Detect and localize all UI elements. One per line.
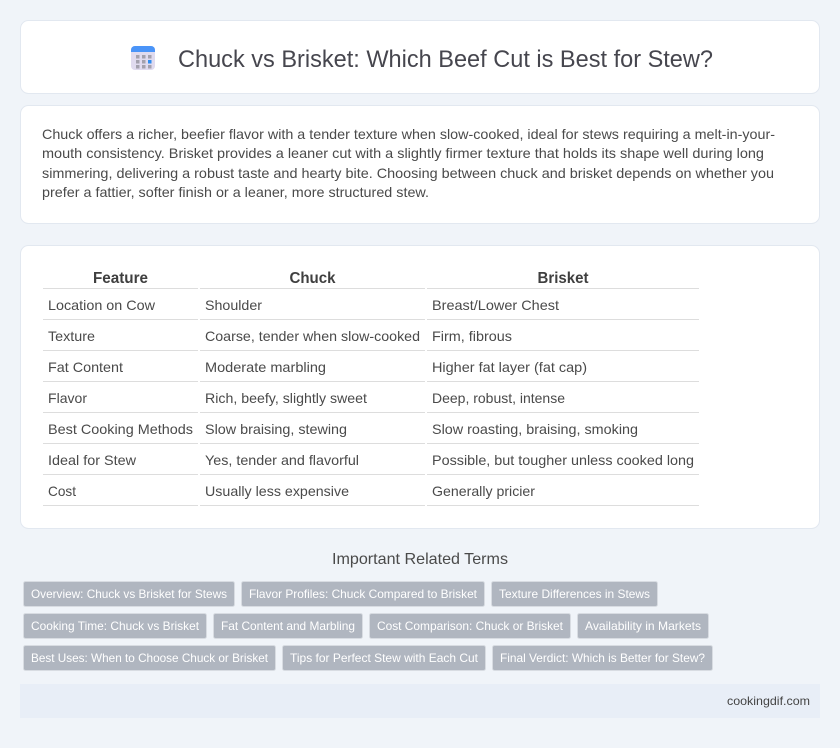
tag (282, 646, 486, 670)
tag: Cooking Time: Chuck vs Brisket (31, 619, 200, 633)
tag (24, 646, 276, 670)
table row: best cooking methods (48, 421, 638, 437)
tag: Final Verdict: Which is Better for Stew? (500, 651, 705, 665)
tag (578, 614, 708, 638)
related term tags (24, 582, 712, 670)
table row: texture: Coarse, tender when slow-cooked (205, 328, 420, 344)
table row: flavor: Rich, beefy, slightly sweet (205, 390, 367, 406)
table row: location on cow (48, 297, 559, 313)
text block: introduction paragraph: Chuck offers a richer, beefier flavor with a tender texture when slow-cooked, ideal for stews requiring a melt-in-your- (42, 126, 775, 142)
tag: Overview: Chuck vs Brisket for Stews (31, 587, 227, 601)
table row: cost (48, 483, 535, 499)
tag: Best Uses: When to Choose Chuck or Brisket (31, 651, 269, 665)
table row: location on cow: Shoulder (205, 297, 262, 313)
table row: flavor: Deep, robust, intense (432, 390, 565, 406)
table row: best cooking methods: Slow braising, stewing (205, 421, 347, 437)
table row: flavor: Flavor (48, 390, 87, 406)
text block: introduction paragraph: mouth consistency. Brisket provides a leaner cut with a slightly firmer texture that holds its shape well during long (42, 145, 764, 161)
table row: cost: Usually less expensive (205, 483, 349, 499)
table row: cost: Cost (48, 483, 76, 499)
table row: fat content: Higher fat layer (fat cap) (432, 359, 587, 375)
tag (24, 614, 206, 638)
table row: location on cow: Breast/Lower Chest (432, 297, 559, 313)
tag (24, 582, 234, 606)
table row: ideal for stew: Yes, tender and flavorful (205, 452, 359, 468)
tag: Tips for Perfect Stew with Each Cut (290, 651, 479, 665)
text block: introduction paragraph: simmering, delivering a robust taste and hearty bite. Choosing between chuck and brisket depends on whether you (42, 165, 774, 181)
icon: calendar (131, 46, 155, 70)
text block: introduction paragraph (42, 126, 775, 200)
table row: fat content: Moderate marbling (205, 359, 326, 375)
panel: comparison table (20, 246, 820, 528)
tag: Availability in Markets (585, 619, 701, 633)
table row: fat content (48, 359, 587, 375)
table header row (93, 270, 589, 287)
table row: ideal for stew: Ideal for Stew (48, 452, 137, 468)
panel: title header (20, 20, 820, 94)
table row: flavor (48, 390, 565, 406)
footer (20, 684, 820, 718)
table row: ideal for stew (48, 452, 694, 468)
tag (492, 646, 712, 670)
tag: Texture Differences in Stews (499, 587, 650, 601)
table header row: Brisket (538, 270, 589, 287)
tag (370, 614, 570, 638)
table row: texture: Texture (48, 328, 95, 344)
panel: introduction (20, 106, 820, 224)
title: Chuck vs Brisket: Which Beef Cut is Best for Stew? (178, 46, 713, 73)
heading: important related terms: Important Related Terms (332, 551, 508, 568)
tag: Flavor Profiles: Chuck Compared to Brisket (249, 587, 478, 601)
table header row: Chuck (290, 270, 336, 287)
table row: cost: Generally pricier (432, 483, 535, 499)
table row: texture (48, 328, 512, 344)
footer source label: cookingdif.com (727, 694, 810, 708)
table row: best cooking methods: Slow roasting, braising, smoking (432, 421, 638, 437)
table row: ideal for stew: Possible, but tougher unless cooked long (432, 452, 694, 468)
table row: best cooking methods: Best Cooking Methods (48, 421, 193, 437)
table row: location on cow: Location on Cow (48, 297, 156, 313)
tag (214, 614, 362, 638)
tag: Cost Comparison: Chuck or Brisket (377, 619, 564, 633)
tag (242, 582, 484, 606)
table header row: Feature (93, 270, 148, 287)
text block: introduction paragraph: prefer a fattier, softer finish or a leaner, more structured stew. (42, 184, 429, 200)
table row: fat content: Fat Content (48, 359, 123, 375)
tag (492, 582, 658, 606)
table row: texture: Firm, fibrous (432, 328, 512, 344)
tag: Fat Content and Marbling (221, 619, 355, 633)
